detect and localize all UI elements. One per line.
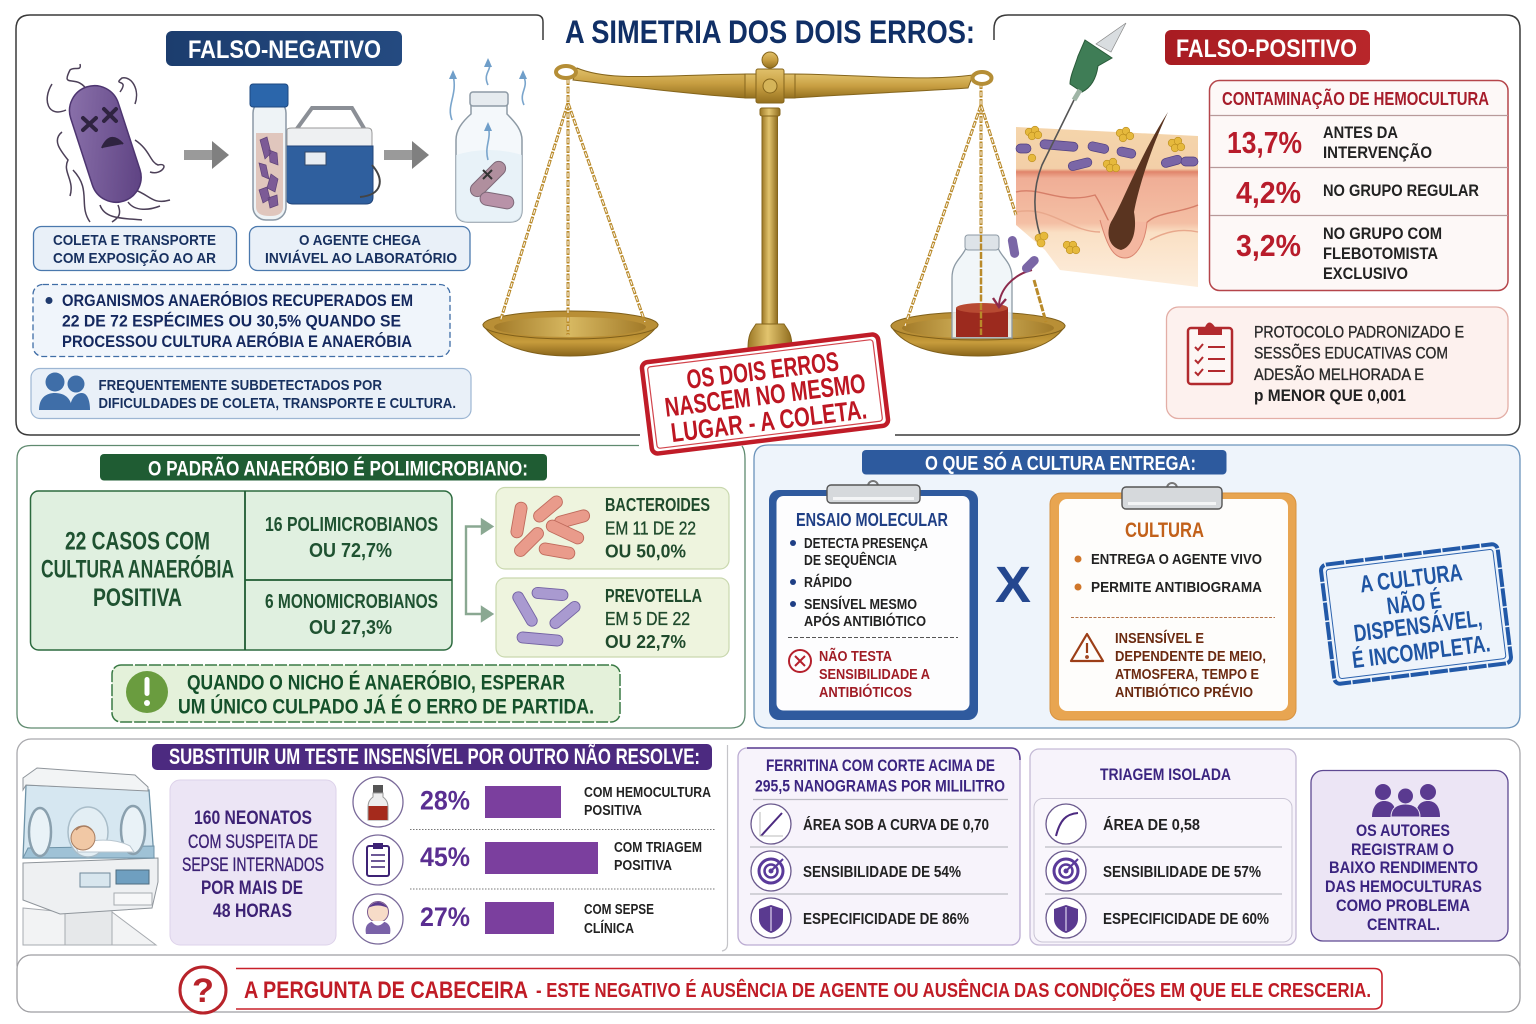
icon: warning triangle	[1071, 634, 1103, 661]
card: bacteroides: OU 50,0%	[605, 540, 686, 562]
beam	[556, 66, 992, 98]
clipboard: cultura: ANTIBIÓTICO PRÉVIO	[1115, 683, 1253, 701]
label: coleta e transporte: COLETA E TRANSPORTE	[53, 232, 216, 249]
clipboard: ensaio molecular: NÃO TESTA	[819, 647, 892, 665]
callout: frequentemente subdetectados	[31, 368, 471, 418]
arrow: bacterium to transport	[184, 141, 229, 169]
box: 160 neonatos: COM SUSPEITA DE	[188, 832, 318, 853]
label: agente inviável: O AGENTE CHEGA	[299, 232, 421, 249]
label: agente inviável	[250, 226, 470, 270]
stamp: cultura não é dispensável	[1320, 544, 1512, 684]
icon: checklist	[353, 835, 403, 885]
card: prevotella	[496, 578, 729, 657]
icon: neonatal incubator	[23, 768, 158, 945]
stamp: cultura não é dispensável: É INCOMPLETA.	[1350, 629, 1492, 674]
icon: people	[39, 372, 90, 410]
icon: group of people	[1372, 784, 1440, 817]
post	[748, 52, 792, 350]
table: contaminação de hemocultura: 4,2%	[1236, 175, 1301, 210]
panel: pergunta de cabeceira	[17, 955, 1520, 1013]
panel: falso-negativo	[16, 15, 640, 435]
card: os autores: REGISTRAM O	[1351, 840, 1454, 859]
right chains	[905, 82, 1046, 326]
icon: exclamation	[126, 671, 168, 713]
icon: roc curve	[1046, 804, 1086, 844]
icon: question mark: ?	[192, 972, 214, 1010]
arrow: split connector	[466, 520, 492, 620]
callout: protocolo padronizado: p MENOR QUE 0,001	[1254, 387, 1406, 405]
stamp: cultura não é dispensável: NÃO É	[1385, 586, 1443, 620]
clipboard: ensaio molecular: APÓS ANTIBIÓTICO	[804, 612, 926, 630]
clipboard: ensaio molecular: ANTIBIÓTICOS	[819, 683, 912, 701]
arrow: transport to laboratory	[384, 141, 429, 169]
icon: baby	[353, 894, 403, 944]
icon: shield	[1046, 898, 1086, 938]
callout: nicho anaeróbio: UM ÚNICO CULPADO JÁ É O ERRO DE PARTIDA.	[178, 694, 594, 718]
label: coleta e transporte	[34, 226, 236, 270]
panel: o que só a cultura entrega	[754, 445, 1520, 728]
stamp: cultura não é dispensável: A CULTURA	[1358, 559, 1464, 599]
icon: dead bacterium	[47, 64, 170, 222]
card: os autores: OS AUTORES	[1356, 821, 1450, 840]
icon: tube and cooler	[250, 84, 380, 220]
versus x: X	[995, 556, 1031, 613]
card: triagem isolada: TRIAGEM ISOLADA	[1100, 765, 1231, 784]
icon: target	[751, 851, 791, 891]
chart row: 27% sepse clínica	[353, 894, 654, 944]
chart row: 28% hemocultura: 28%	[420, 786, 470, 816]
table: 22 casos: POSITIVA	[93, 584, 182, 612]
clipboard: cultura: ATMOSFERA, TEMPO E	[1115, 667, 1259, 683]
callout: frequentemente subdetectados: FREQUENTEMENTE SUBDETECTADOS POR	[98, 377, 382, 394]
chart row: 45% triagem: 45%	[420, 842, 470, 872]
card: os autores	[1311, 770, 1508, 941]
heading: cultura entrega: O QUE SÓ A CULTURA ENTREGA:	[925, 451, 1196, 475]
icon: pink bacilli	[510, 493, 591, 560]
banner text: - ESTE NEGATIVO É AUSÊNCIA DE AGENTE OU AUSÊNCIA DAS CONDIÇÕES EM QUE ELE CRESCERIA.	[536, 978, 1371, 1002]
icon: clipboard checklist	[1188, 322, 1232, 384]
callout: frequentemente subdetectados: DIFICULDADES DE COLETA, TRANSPORTE E CULTURA.	[98, 395, 456, 412]
banner heading: A PERGUNTA DE CABECEIRA	[244, 977, 528, 1004]
callout: protocolo padronizado: ADESÃO MELHORADA E	[1254, 364, 1424, 384]
clipboard: cultura: DEPENDENTE DE MEIO,	[1115, 649, 1266, 665]
card: os autores: CENTRAL.	[1367, 915, 1440, 934]
callout: nicho anaeróbio	[112, 665, 620, 722]
callout: organismos anaeróbios	[33, 284, 450, 356]
table: 22 casos: 22 CASOS COM	[65, 528, 210, 556]
card: os autores: DAS HEMOCULTURAS	[1325, 877, 1482, 896]
card: bacteroides	[496, 488, 729, 569]
table: contaminação de hemocultura: 13,7%	[1227, 125, 1302, 160]
callout: protocolo padronizado	[1166, 307, 1508, 418]
icon: skin with hair follicle	[1016, 112, 1198, 287]
clipboard: cultura: INSENSÍVEL E	[1115, 630, 1204, 647]
table: 22 casos: OU 72,7%	[309, 540, 392, 562]
icon: bottle with non-viable agent	[449, 58, 527, 222]
clipboard: ensaio molecular: SENSIBILIDADE A	[819, 667, 930, 683]
stamp: os dois erros: NASCEM NO MESMO	[663, 368, 867, 423]
chart row: 28% hemocultura: POSITIVA	[584, 803, 642, 819]
card: ferritina: ESPECIFICIDADE DE 86%	[803, 911, 969, 928]
box: 160 neonatos: 48 HORAS	[213, 901, 292, 922]
icon: question mark	[180, 967, 226, 1013]
chart row: 45% triagem: POSITIVA	[614, 858, 672, 874]
clip	[827, 481, 920, 503]
label: agente inviável: INVIÁVEL AO LABORATÓRIO	[265, 249, 457, 267]
icon: blood culture bottle	[952, 235, 1041, 338]
callout: protocolo padronizado: PROTOCOLO PADRONIZADO E	[1254, 324, 1464, 342]
clipboard: ensaio molecular: RÁPIDO	[804, 574, 852, 591]
icon: roc curve	[751, 804, 791, 844]
icon: balance scale	[483, 52, 1065, 356]
chart row: 27% sepse clínica: CLÍNICA	[584, 920, 634, 937]
stamp: os dois erros: OS DOIS ERROS	[685, 346, 840, 395]
stamp: os dois erros	[641, 334, 889, 454]
clipboard: cultura	[1050, 483, 1296, 720]
clipboard: ensaio molecular: SENSÍVEL MESMO	[804, 596, 917, 613]
icon: blood bottle	[353, 777, 403, 827]
table: contaminação de hemocultura	[1210, 80, 1508, 290]
heading: substituir: SUBSTITUIR UM TESTE INSENSÍVEL POR OUTRO NÃO RESOLVE:	[169, 744, 700, 769]
clipboard: cultura: ENTREGA O AGENTE VIVO	[1091, 551, 1262, 568]
heading: padrão anaeróbio	[100, 454, 547, 480]
icon: purple bacilli	[511, 587, 582, 646]
table: contaminação de hemocultura: EXCLUSIVO	[1323, 265, 1408, 283]
clipboard: ensaio molecular: DETECTA PRESENÇA	[804, 536, 928, 552]
left pan	[483, 311, 658, 356]
icon: syringe needle	[1035, 23, 1126, 247]
chart row: 27% sepse clínica: 27%	[420, 902, 470, 932]
table: 22 casos: 16 POLIMICROBIANOS	[265, 514, 438, 536]
card: triagem isolada: ESPECIFICIDADE DE 60%	[1103, 911, 1269, 928]
card: os autores: COMO PROBLEMA	[1336, 896, 1470, 915]
left chains	[500, 78, 645, 335]
callout: organismos anaeróbios: 22 DE 72 ESPÉCIMES OU 30,5% QUANDO SE	[62, 312, 401, 330]
card: triagem isolada	[1030, 749, 1296, 945]
callout: protocolo padronizado: SESSÕES EDUCATIVAS COM	[1254, 342, 1448, 362]
table: contaminação de hemocultura: NO GRUPO REGULAR	[1323, 182, 1479, 200]
stamp: os dois erros: LUGAR - A COLETA.	[669, 394, 868, 448]
card: triagem isolada: ÁREA DE 0,58	[1103, 815, 1200, 834]
chart row: 45% triagem	[353, 835, 702, 885]
table: contaminação de hemocultura: INTERVENÇÃO	[1323, 142, 1432, 162]
clipboard: ensaio molecular: ENSAIO MOLECULAR	[796, 510, 948, 530]
callout: organismos anaeróbios: ORGANISMOS ANAERÓBIOS RECUPERADOS EM	[62, 291, 413, 310]
panel: padrão anaeróbio	[17, 446, 745, 728]
clip	[1122, 483, 1222, 509]
icon: shield	[751, 898, 791, 938]
card: prevotella: OU 22,7%	[605, 631, 686, 652]
card: ferritina: 295,5 NANOGRAMAS POR MILILITRO	[755, 776, 1005, 796]
table: 22 casos: OU 27,3%	[309, 617, 392, 639]
card: ferritina: FERRITINA COM CORTE ACIMA DE	[766, 756, 995, 775]
table: contaminação de hemocultura: 3,2%	[1236, 228, 1301, 263]
box: 160 neonatos: SEPSE INTERNADOS	[182, 855, 324, 876]
callout: nicho anaeróbio: QUANDO O NICHO É ANAERÓBIO, ESPERAR	[187, 670, 565, 694]
banner outline	[236, 968, 1382, 1009]
table: contaminação de hemocultura: FLEBOTOMISTA	[1323, 245, 1438, 263]
chart row: 28% hemocultura	[353, 777, 711, 827]
stamp: cultura não é dispensável: DISPENSÁVEL,	[1352, 604, 1484, 648]
card: bacteroides: BACTEROIDES	[605, 494, 710, 515]
clipboard: ensaio molecular	[769, 481, 978, 720]
card: triagem isolada: SENSIBILIDADE DE 57%	[1103, 864, 1261, 881]
heading: falso-negativo: FALSO-NEGATIVO	[188, 36, 381, 64]
right pan	[891, 312, 1065, 356]
callout: organismos anaeróbios: PROCESSOU CULTURA AERÓBIA E ANAERÓBIA	[62, 332, 412, 351]
table: contaminação de hemocultura: NO GRUPO COM	[1323, 225, 1442, 243]
clipboard: ensaio molecular: DE SEQUÊNCIA	[804, 551, 897, 569]
icon: x in circle	[789, 650, 811, 672]
table: 22 casos: 6 MONOMICROBIANOS	[265, 591, 438, 613]
card: ferritina	[738, 748, 1020, 945]
panel: substituir um teste	[17, 739, 1520, 979]
chart row: 45% triagem: COM TRIAGEM	[614, 840, 702, 856]
box: 160 neonatos: 160 NEONATOS	[194, 808, 312, 829]
table: 22 casos	[30, 491, 452, 650]
table: 22 casos: CULTURA ANAERÓBIA	[41, 554, 234, 584]
label: coleta e transporte: COM EXPOSIÇÃO AO AR	[53, 249, 216, 267]
card: ferritina: ÁREA SOB A CURVA DE 0,70	[803, 815, 989, 834]
chart row: 27% sepse clínica: COM SEPSE	[584, 902, 654, 918]
card: ferritina: SENSIBILIDADE DE 54%	[803, 864, 961, 881]
card: bacteroides: EM 11 DE 22	[605, 518, 696, 538]
clipboard: cultura: CULTURA	[1125, 519, 1204, 542]
table: contaminação de hemocultura: ANTES DA	[1323, 124, 1398, 142]
card: os autores: BAIXO RENDIMENTO	[1329, 858, 1478, 877]
heading: cultura entrega	[862, 450, 1226, 475]
chart row: 28% hemocultura: COM HEMOCULTURA	[584, 785, 711, 801]
icon: target	[1046, 851, 1086, 891]
clipboard: cultura: PERMITE ANTIBIOGRAMA	[1091, 579, 1262, 596]
heading: padrão anaeróbio: O PADRÃO ANAERÓBIO É POLIMICROBIANO:	[148, 456, 528, 480]
panel: falso-positivo	[895, 15, 1520, 435]
card: prevotella: PREVOTELLA	[605, 585, 702, 606]
title: A SIMETRIA DOS DOIS ERROS:	[565, 14, 975, 50]
card: prevotella: EM 5 DE 22	[605, 608, 690, 629]
heading: falso-positivo: FALSO-POSITIVO	[1176, 35, 1357, 63]
box: 160 neonatos: POR MAIS DE	[201, 878, 303, 899]
box: 160 neonatos	[170, 780, 336, 945]
